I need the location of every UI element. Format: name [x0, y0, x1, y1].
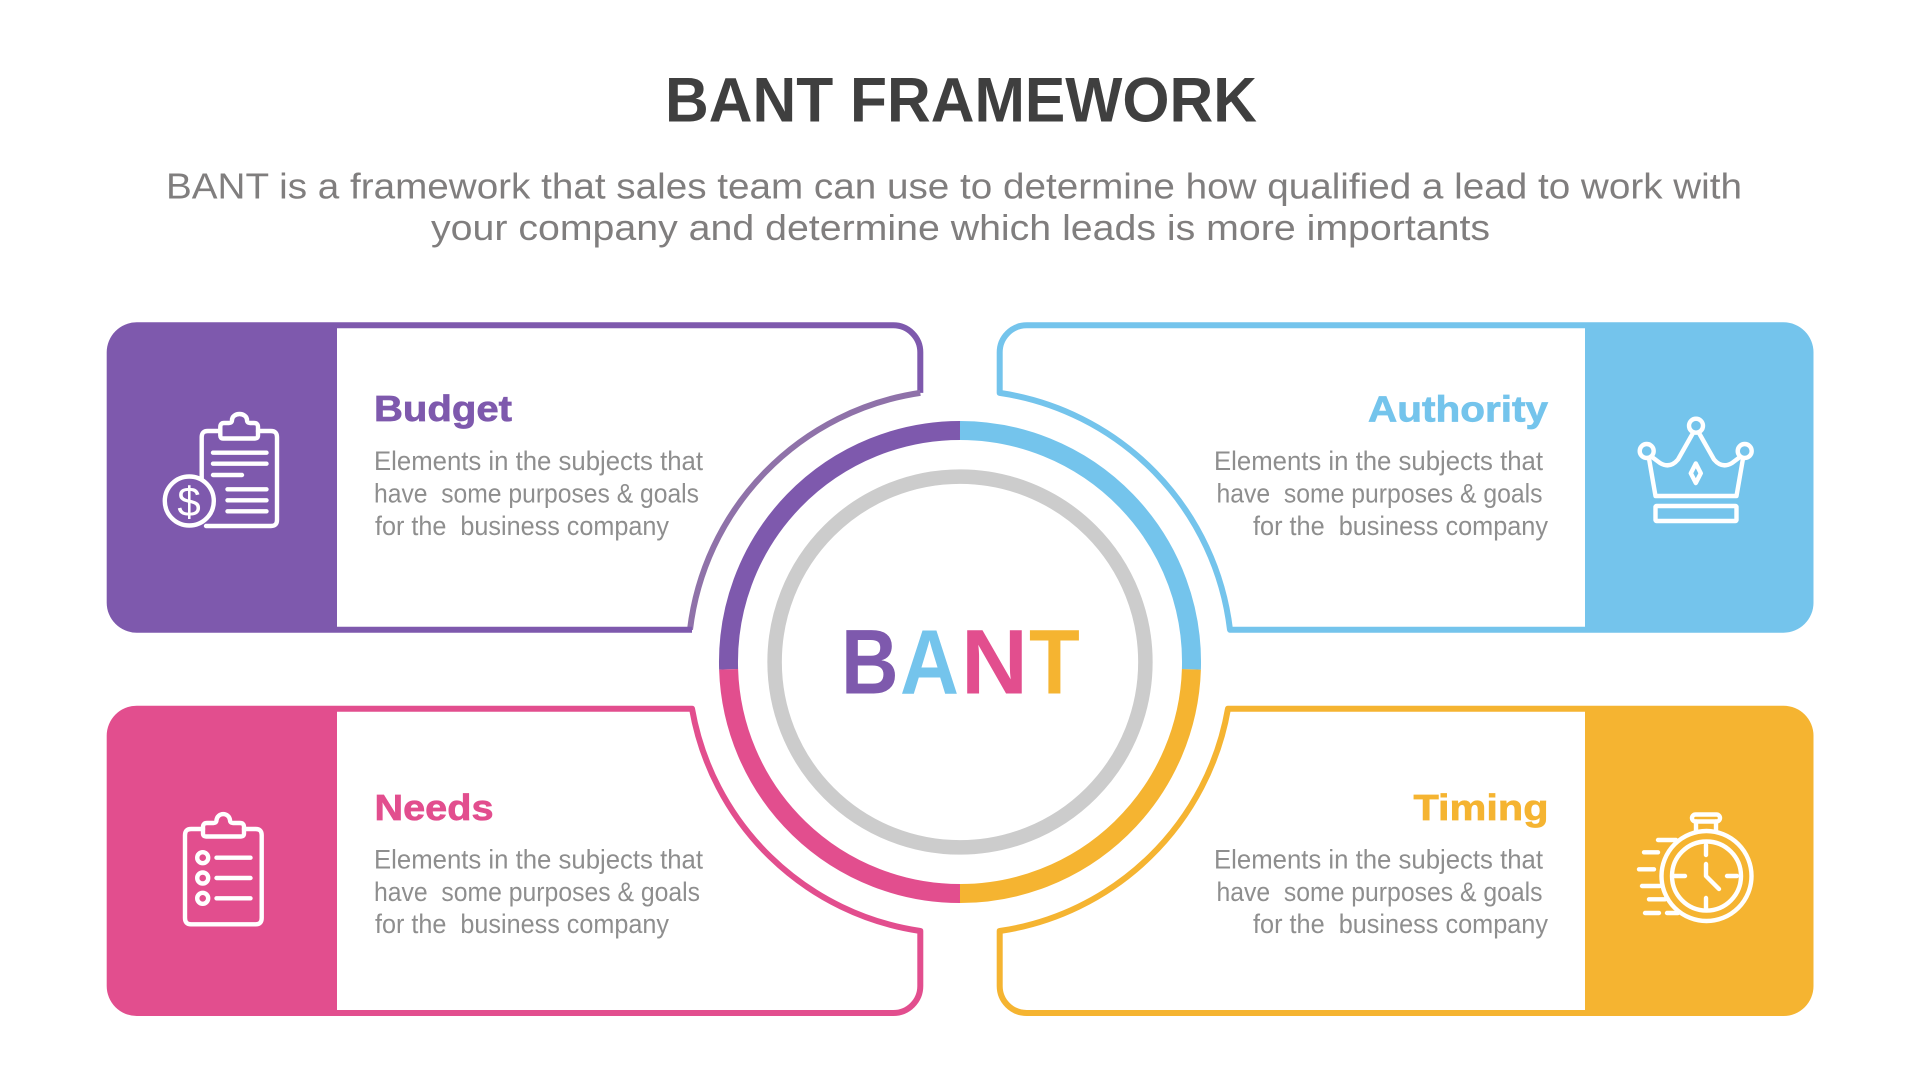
needs description: Elements in the subjects that [374, 844, 703, 874]
budget description [374, 446, 703, 541]
budget description: Elements in the subjects that [374, 446, 703, 476]
budget description: for the business company [375, 511, 669, 541]
budget description: have some purposes & goals [374, 479, 699, 509]
budget colour block [107, 322, 337, 633]
icon: crown [1640, 419, 1752, 521]
timing outline [1000, 709, 1585, 1013]
authority description: for the business company [1253, 511, 1548, 541]
authority description: Elements in the subjects that [1214, 446, 1543, 476]
central ring chart [728, 430, 1192, 894]
icon: checklist clipboard [185, 814, 262, 924]
ring segment: needs [729, 669, 960, 894]
timing heading: Timing [1414, 787, 1548, 828]
authority heading: Authority [1368, 388, 1548, 430]
needs description: have some purposes & goals [374, 877, 700, 907]
ring segment: timing [960, 669, 1191, 894]
icon: budget clipboard with coin: $ [177, 478, 201, 525]
subtitle: your company and determine which leads is more importants [431, 207, 1490, 248]
timing description: for the business company [1253, 909, 1548, 939]
center label BANT: A [900, 611, 959, 713]
panel: authority [1000, 322, 1814, 633]
center label BANT: B [841, 611, 899, 713]
icon: stopwatch [1639, 814, 1752, 921]
panel: needs [107, 706, 920, 1016]
subtitle [166, 165, 1742, 248]
needs outline [337, 709, 920, 1013]
authority colour block [1585, 322, 1814, 633]
budget outline [337, 325, 920, 630]
title: BANT FRAMEWORK [665, 66, 1257, 136]
needs description [374, 844, 703, 939]
subtitle: BANT is a framework that sales team can use to determine how qualified a lead to work with [166, 165, 1742, 206]
ring segment: authority [960, 430, 1192, 669]
ring segment: budget [728, 430, 960, 669]
authority outline [1000, 325, 1585, 630]
budget heading: Budget [374, 388, 512, 429]
needs colour block [107, 706, 337, 1016]
icon: budget clipboard with coin [165, 414, 277, 526]
panel: timing [1000, 706, 1814, 1016]
timing description [1214, 844, 1548, 939]
authority description [1214, 446, 1548, 541]
timing colour block [1585, 706, 1814, 1016]
needs heading: Needs [374, 787, 494, 828]
needs description: for the business company [375, 909, 669, 939]
timing description: Elements in the subjects that [1214, 844, 1543, 874]
center label BANT: T [1029, 611, 1080, 713]
center label BANT [841, 611, 1080, 713]
timing description: have some purposes & goals [1216, 877, 1542, 907]
inner grey ring [775, 477, 1145, 847]
panel: budget [107, 322, 920, 633]
center label BANT: N [961, 611, 1028, 713]
authority description: have some purposes & goals [1216, 478, 1542, 508]
